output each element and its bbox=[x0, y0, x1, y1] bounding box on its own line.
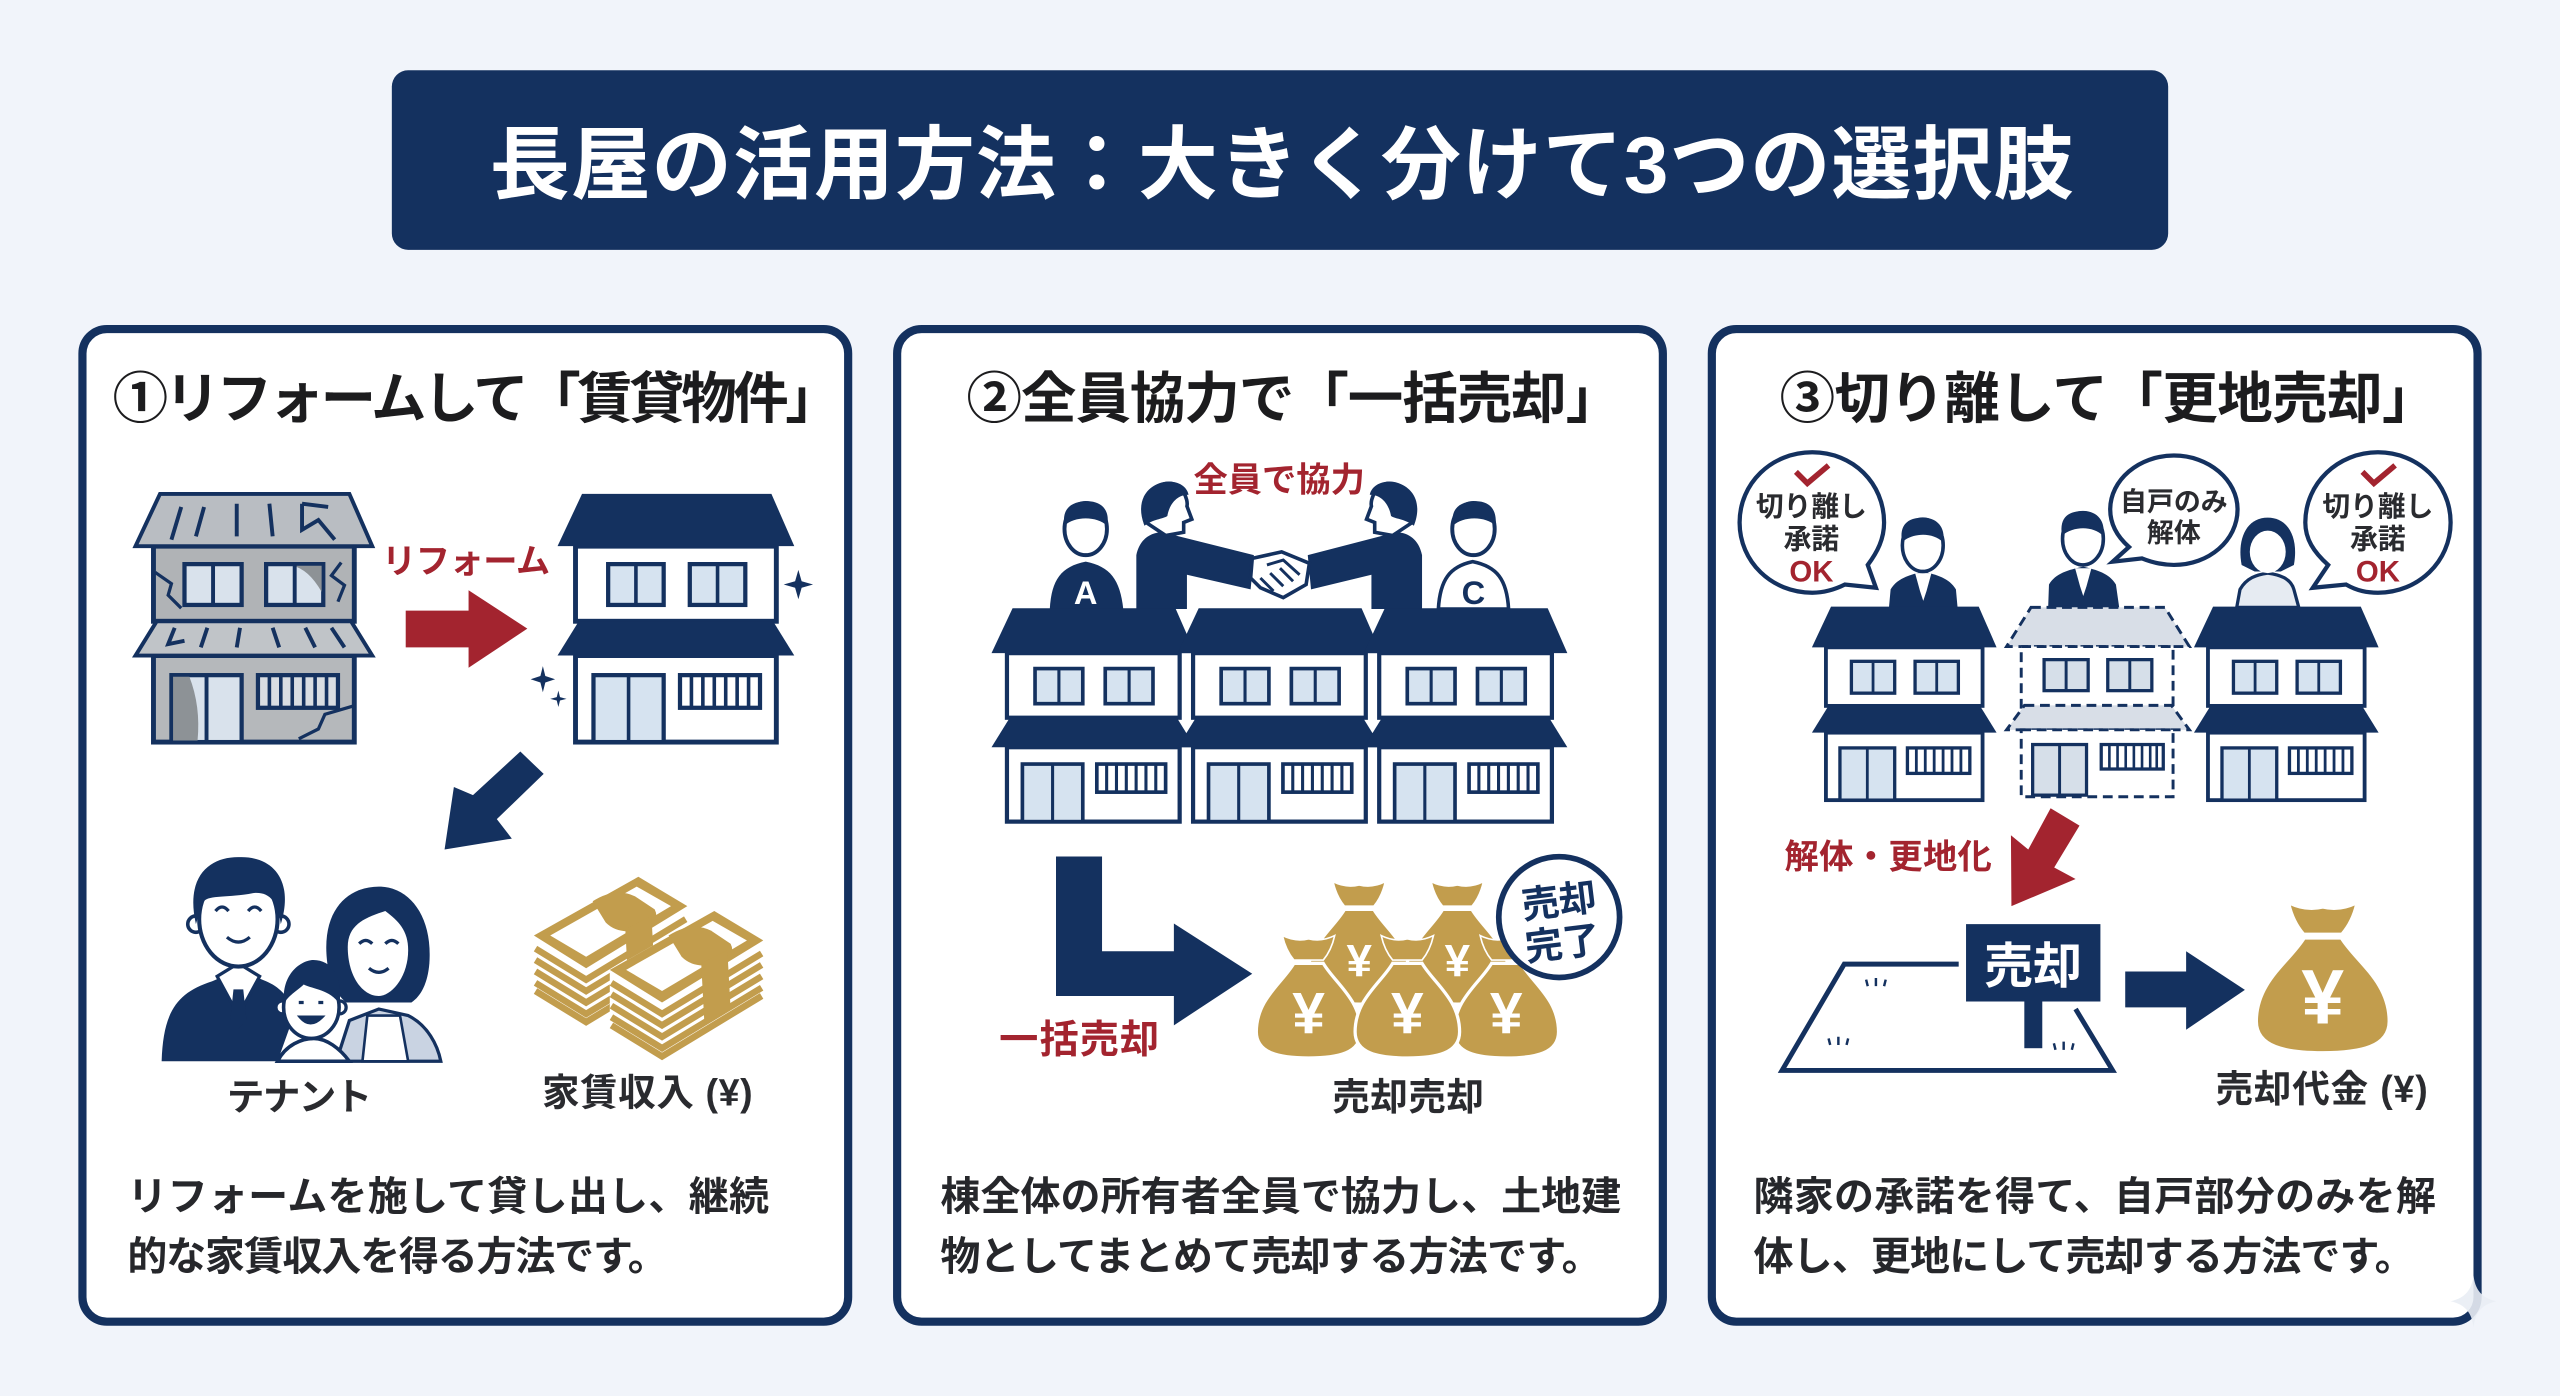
text: panel 2 description bbox=[940, 1175, 1621, 1279]
panel: bulk sale bbox=[897, 329, 1663, 1322]
heading: panel 2: ②全員協力で「一括売却」 bbox=[967, 368, 1621, 430]
icon: money bag bbox=[2256, 904, 2390, 1053]
people shaking hands: A bbox=[1074, 574, 1098, 611]
title banner bbox=[392, 70, 2168, 250]
text: panel 3 description: 隣家の承諾を得て、自戸部分のみを解 bbox=[1753, 1175, 2436, 1219]
arrow: to tenant bbox=[445, 752, 544, 850]
label: bulk sale: 一括売却 bbox=[999, 1019, 1159, 1062]
heading: panel 3: ③切り離して「更地売却」 bbox=[1780, 368, 2438, 430]
people: owners bbox=[1889, 511, 2299, 607]
icon: damaged house bbox=[136, 494, 372, 742]
arrow: demolish bbox=[2011, 808, 2080, 906]
row houses bbox=[992, 608, 1567, 822]
speech bubble: left neighbor OK: 承諾 bbox=[1784, 524, 1839, 555]
speech bubble: right neighbor OK bbox=[2305, 452, 2451, 593]
arrow: reform bbox=[406, 590, 527, 668]
icon: money bags: ¥ bbox=[1490, 982, 1523, 1047]
speech bubble: center owner: 解体 bbox=[2147, 518, 2201, 548]
badge: sale complete bbox=[1499, 857, 1620, 978]
text: panel 3 description: 体し、更地にして売却する方法です。 bbox=[1753, 1235, 2415, 1279]
people shaking hands bbox=[1050, 482, 1509, 611]
speech bubble: center owner: 自戸のみ bbox=[2120, 487, 2228, 517]
title banner: 長屋の活用方法：大きく分けて3つの選択肢 bbox=[490, 121, 2073, 210]
label: demolish and clear: 解体・更地化 bbox=[1784, 839, 1992, 877]
icon: money bags bbox=[1256, 882, 1559, 1058]
vacant lot with sign bbox=[1782, 924, 2113, 1070]
arrow: L-shaped to sale bbox=[1056, 857, 1252, 1025]
label: reform: リフォーム bbox=[382, 543, 550, 581]
label: sale: 売却売却 bbox=[1332, 1076, 1484, 1118]
icon: money bag: ¥ bbox=[2301, 956, 2344, 1041]
label: rent income: 家賃収入 (¥) bbox=[542, 1071, 753, 1113]
vacant lot with sign: 売却 bbox=[1984, 940, 2082, 994]
icon: money bags: ¥ bbox=[1391, 982, 1424, 1047]
icon: tenant family bbox=[162, 857, 441, 1061]
speech bubble: left neighbor OK: 切り離し bbox=[1756, 491, 1867, 522]
speech bubble: right neighbor OK: OK bbox=[2356, 555, 2400, 588]
icon: money bags: ¥ bbox=[1292, 982, 1325, 1047]
houses: left neighbor bbox=[1812, 607, 1997, 800]
heading: panel 1: ①リフォームして「賃貸物件」 bbox=[113, 368, 841, 430]
icon: money bags: ¥ bbox=[1445, 935, 1471, 986]
text: panel 1 description: リフォームを施して貸し出し、継続 bbox=[127, 1175, 769, 1219]
panel: reform and rent bbox=[82, 329, 848, 1322]
text: panel 1 description: 的な家賃収入を得る方法です。 bbox=[127, 1235, 668, 1279]
label: tenant: テナント bbox=[227, 1076, 372, 1118]
label: cooperate: 全員で協力 bbox=[1193, 461, 1365, 499]
house: dashed demolition unit bbox=[2007, 607, 2189, 797]
watermark: faint sparkle bbox=[2451, 1275, 2496, 1327]
houses: right neighbor bbox=[2194, 607, 2379, 800]
people shaking hands: C bbox=[1462, 574, 1485, 611]
text: panel 2 description: 棟全体の所有者全員で協力し、土地建 bbox=[940, 1175, 1621, 1219]
icon: renovated house bbox=[558, 494, 794, 742]
icon: sparkles bbox=[531, 570, 813, 707]
speech bubble: right neighbor OK: 承諾 bbox=[2350, 524, 2406, 555]
badge: sale complete: 完了 bbox=[1523, 918, 1602, 969]
arrow: to proceeds bbox=[2125, 951, 2245, 1030]
speech bubble: left neighbor OK: OK bbox=[1789, 555, 1833, 588]
speech bubble: left neighbor OK bbox=[1740, 452, 1884, 593]
text: panel 2 description: 物としてまとめて売却する方法です。 bbox=[940, 1235, 1602, 1279]
speech bubble: center owner bbox=[2110, 456, 2238, 565]
icon: stacks of cash bbox=[534, 877, 763, 1058]
label: proceeds: 売却代金 (¥) bbox=[2216, 1068, 2428, 1110]
icon: money bags: ¥ bbox=[1346, 935, 1372, 986]
panel: vacant lot sale bbox=[1712, 329, 2478, 1322]
text: panel 1 description bbox=[127, 1175, 769, 1279]
text: panel 3 description bbox=[1753, 1175, 2436, 1279]
badge: sale complete: 売却 bbox=[1519, 876, 1599, 927]
speech bubble: right neighbor OK: 切り離し bbox=[2322, 491, 2433, 522]
